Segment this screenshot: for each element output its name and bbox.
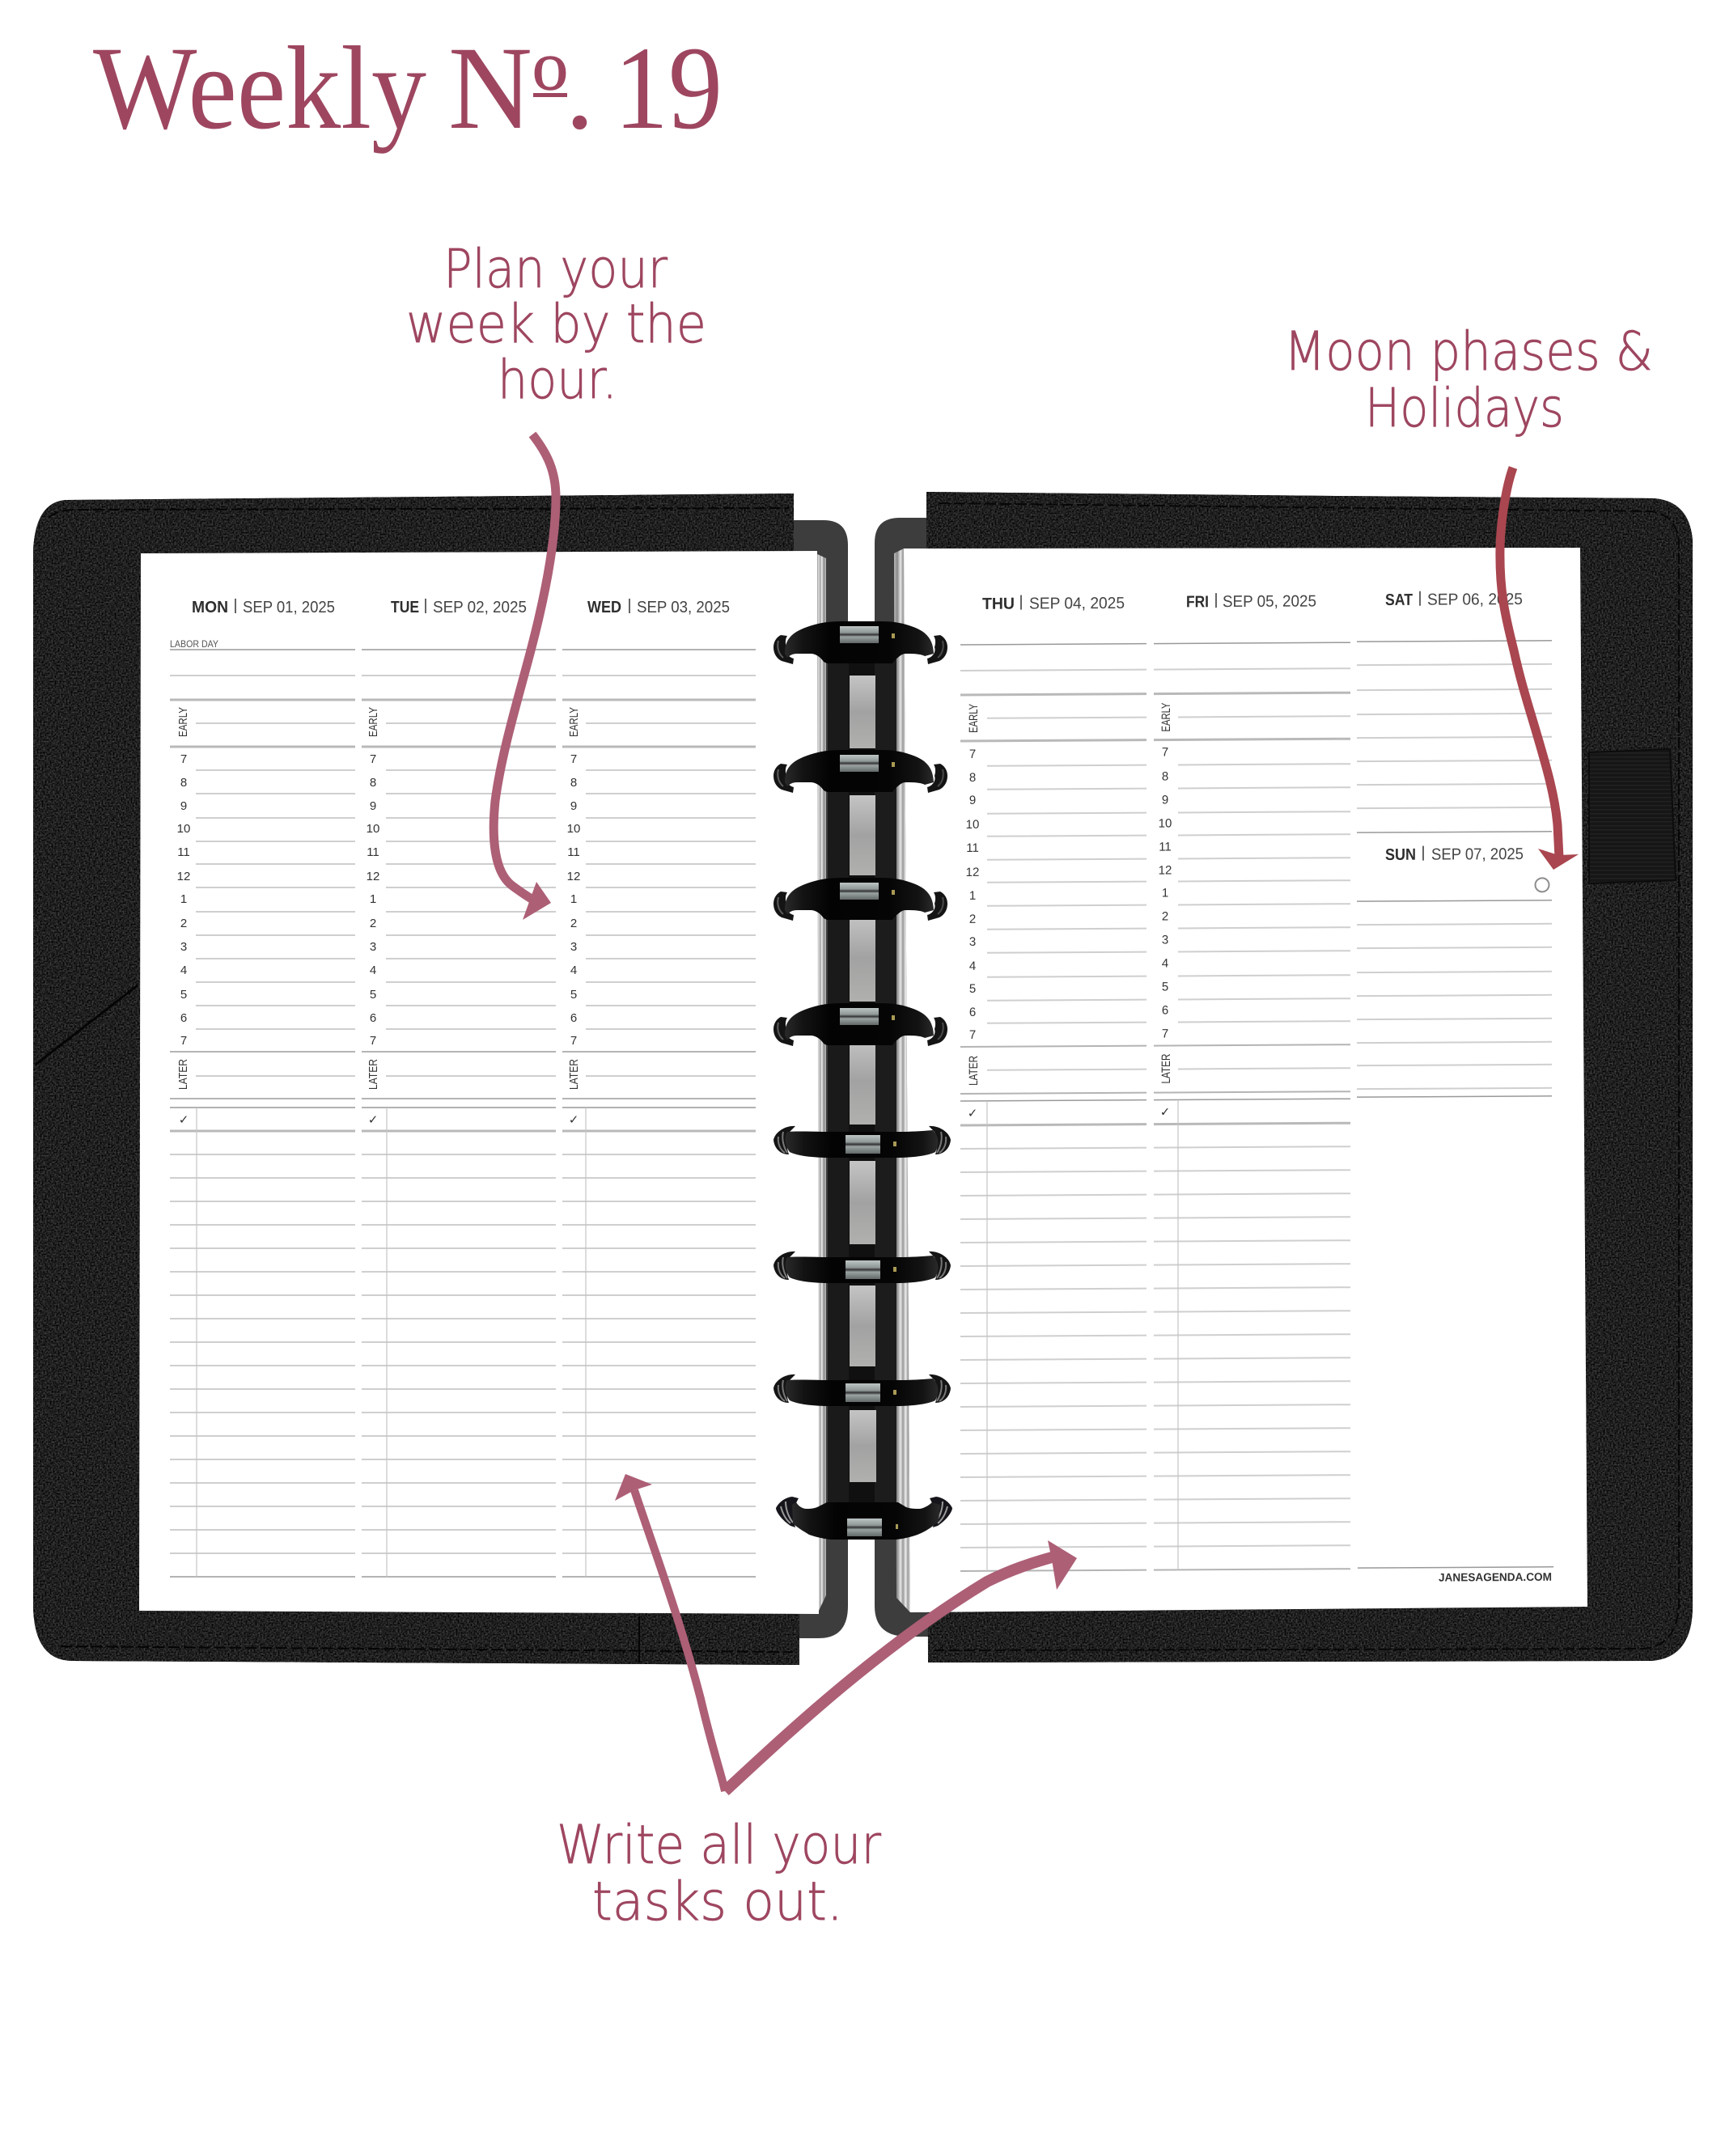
TUE column: 3 [370,940,376,954]
paper stack edge: right [894,549,910,1612]
TUE column: SEP 02, 2025 [433,599,527,616]
caption: plan your week by the hour: Plan your [443,238,668,300]
MON column: 7 [180,752,187,766]
WED column: 8 [570,776,577,790]
caption: write all your tasks out: tasks out. [592,1870,843,1933]
caption: moon phases and holidays: Moon phases & [1284,320,1653,383]
FRI column: 5 [1162,981,1168,994]
WED column: 9 [570,799,577,813]
title: N [448,22,532,154]
THU column: SEP 04, 2025 [1029,595,1125,613]
TUE column: TUE [391,599,419,616]
THU column: 9 [969,794,976,807]
SAT column [1357,591,1552,832]
MON column: 1 [180,892,187,906]
TUE column: 7 [370,1034,376,1048]
binder spine [828,651,896,1517]
right planner page [904,548,1587,1612]
MON column: 4 [180,964,187,977]
caption: plan your week by the hour [406,238,706,411]
TUE column: 6 [370,1011,376,1025]
MON column: LATER [176,1059,190,1090]
THU column: 4 [969,959,976,973]
WED column: 7 [570,752,577,766]
WED column: 2 [570,917,577,930]
THU column: 12 [966,866,979,879]
MON column: 8 [180,776,187,790]
FRI column: 1 [1162,887,1168,900]
binder plate: left [789,520,848,1638]
MON column: 5 [180,988,187,1002]
FRI column: 4 [1162,957,1168,971]
leather cover: right [926,492,1693,1663]
SUN column: SUN [1385,846,1416,864]
THU column: 11 [966,841,979,855]
MON column: 3 [180,940,187,954]
MON column: 2 [180,917,187,930]
FRI column: 11 [1159,840,1172,854]
title: . [565,22,595,154]
TUE column: 7 [370,752,376,766]
TUE column: 11 [367,845,379,859]
WED column: 5 [570,988,577,1002]
binder plate: right [875,518,930,1637]
FRI column: 12 [1159,863,1172,878]
THU column: EARLY [967,704,981,733]
WED column: 7 [570,1034,577,1048]
MON column: 12 [177,870,190,883]
THU column: 2 [969,913,976,926]
MON column: 9 [180,799,187,813]
FRI column: 10 [1159,816,1172,831]
THU column: LATER [967,1056,981,1086]
TUE column: 2 [370,917,376,930]
FRI column: 8 [1162,770,1168,784]
title [93,22,723,161]
arrow: write all your tasks (double-headed) [615,1474,1077,1791]
THU column: THU [982,595,1015,613]
SAT column: SEP 06, 2025 [1427,591,1523,609]
title: 19 [614,22,723,154]
TUE column: 5 [370,988,376,1002]
icon: moon phase [1536,878,1549,892]
caption: write all your tasks out: Write all your [557,1814,882,1876]
MON column: SEP 01, 2025 [243,599,335,616]
title: º [532,29,568,161]
website credit: JANESAGENDA.COM [1439,1570,1552,1584]
THU column: 8 [969,771,976,785]
FRI column: EARLY [1159,702,1173,732]
THU column: 6 [969,1006,976,1019]
FRI column: 6 [1162,1004,1168,1018]
TUE column: ✓ [368,1112,378,1127]
arrow: plan your week [494,434,556,920]
caption: plan your week by the hour: hour. [498,349,617,411]
TUE column: LATER [367,1059,380,1090]
caption: plan your week by the hour: week by the [406,293,706,355]
THU column: 10 [966,818,979,832]
WED column: 3 [570,940,577,954]
MON column: 10 [177,822,190,836]
THU column: 1 [969,889,976,903]
MON column: 7 [180,1034,187,1048]
WED column: 4 [570,964,577,977]
WED column: 1 [570,892,577,906]
FRI column: 2 [1162,910,1168,924]
FRI column: FRI [1186,593,1209,611]
SAT column: SAT [1385,591,1413,609]
leather cover: left [33,493,799,1665]
FRI column: ✓ [1160,1104,1170,1120]
TUE column: 4 [370,964,376,977]
TUE column: 12 [367,870,379,883]
MON column: LABOR DAY [170,638,218,650]
THU column: 7 [969,1028,976,1042]
binder ring 4 [773,1003,947,1046]
FRI column: SEP 05, 2025 [1223,592,1316,611]
TUE column: 10 [367,822,379,836]
binder ring 3 [773,878,947,921]
TUE column: 8 [370,776,376,790]
binder ring 7 [773,1375,951,1406]
WED column: ✓ [569,1112,579,1127]
THU column: 7 [969,748,976,761]
THU column: 3 [969,935,976,949]
FRI column: 9 [1162,794,1168,807]
WED column: 6 [570,1011,577,1025]
page sheet [139,551,819,1614]
MON column [170,599,355,1577]
pen loop [1589,749,1676,883]
MON column: ✓ [179,1112,189,1127]
WED column: SEP 03, 2025 [637,599,730,616]
SUN column [1357,845,1553,1568]
MON column: EARLY [176,707,190,737]
WED column: WED [587,599,621,616]
paper stack edge: left [816,553,826,1614]
WED column: LATER [567,1059,581,1090]
caption: write all your tasks out [557,1814,882,1933]
FRI column: 7 [1162,1027,1168,1041]
caption: moon phases and holidays: Holidays [1365,377,1564,439]
WED column: 10 [567,822,580,836]
title: Weekly [93,22,426,154]
left planner page [139,551,819,1614]
page sheet [904,548,1587,1612]
WED column: 11 [567,845,580,859]
binder ring 6 [773,1252,951,1283]
TUE column: EARLY [367,707,380,737]
THU column: 5 [969,982,976,996]
binder ring 2 [773,750,947,793]
TUE column [362,599,556,1577]
caption: moon phases and holidays [1284,320,1653,439]
TUE column: 9 [370,799,376,813]
FRI column: LATER [1159,1053,1173,1084]
THU column [960,595,1146,1571]
arrow: moon phases [1500,468,1579,870]
FRI column: 3 [1162,934,1168,947]
MON column: MON [192,599,228,616]
FRI column: 7 [1162,746,1168,760]
FRI column [1154,592,1350,1570]
TUE column: 1 [370,892,376,906]
WED column: EARLY [567,707,581,737]
MON column: 11 [177,845,190,859]
WED column [562,599,756,1577]
binder ring 8 [776,1497,952,1540]
WED column: 12 [567,870,580,883]
SUN column: SEP 07, 2025 [1431,845,1524,864]
binder ring 1 [773,621,947,664]
THU column: ✓ [968,1106,977,1120]
binder ring 5 [773,1126,951,1158]
MON column: 6 [180,1011,187,1025]
